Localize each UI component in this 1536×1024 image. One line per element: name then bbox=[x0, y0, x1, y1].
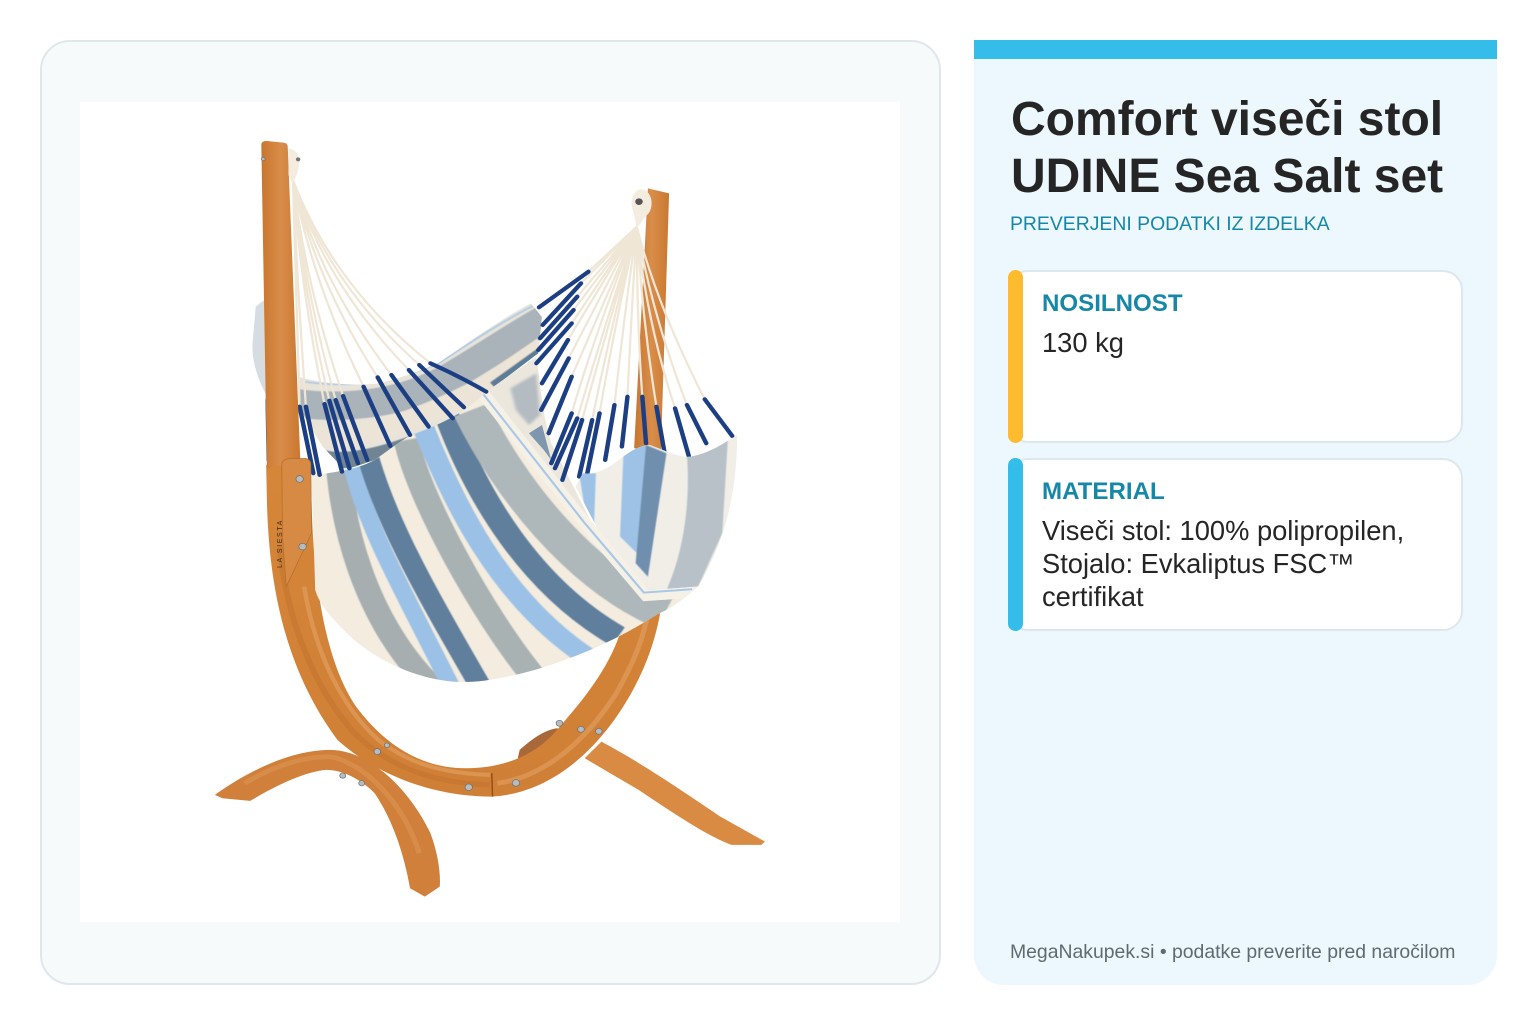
title: UDINE Sea Salt set bbox=[1011, 150, 1443, 203]
right inner fabric bbox=[576, 435, 737, 590]
label: material: MATERIAL bbox=[1042, 478, 1165, 505]
rear fabric: back of seat bbox=[300, 304, 542, 470]
post joint block bbox=[282, 459, 312, 587]
main front seat fabric with stripes bbox=[312, 391, 698, 682]
value: material: Viseči stol: 100% polipropilen, bbox=[1042, 515, 1404, 546]
title: Comfort viseči stol bbox=[1011, 93, 1443, 146]
stand bolts bbox=[261, 157, 602, 791]
subtitle: PREVERJENI PODATKI IZ IZDELKA bbox=[1010, 213, 1330, 235]
label: load capacity: NOSILNOST bbox=[1042, 290, 1183, 317]
left cords bbox=[293, 180, 430, 407]
footer note: MegaNakupek.si • podatke preverite pred naročilom bbox=[1010, 941, 1455, 963]
white photo background bbox=[80, 102, 900, 922]
card accent: amber bbox=[1008, 270, 1023, 443]
cord eyelets bbox=[288, 148, 652, 228]
right cords bbox=[568, 227, 705, 420]
left wooden post bbox=[261, 141, 300, 468]
base foot: left bbox=[215, 750, 440, 897]
inner fold of seat bbox=[486, 357, 590, 520]
brand mark on post: LA SIESTA bbox=[277, 519, 284, 568]
base foot: right bbox=[585, 742, 765, 845]
panel: product info bbox=[974, 40, 1497, 985]
card: material bbox=[1008, 458, 1463, 631]
value: material: Stojalo: Evkaliptus FSC™ bbox=[1042, 548, 1355, 579]
value: material bbox=[1042, 515, 1404, 612]
top accent bar bbox=[974, 40, 1497, 59]
ring: rear shadow bbox=[516, 728, 572, 767]
wooden ring of the stand bbox=[266, 458, 660, 797]
rear fabric flap behind left post bbox=[252, 298, 269, 400]
panel: product image card bbox=[40, 40, 941, 985]
card: load capacity bbox=[1008, 270, 1463, 443]
right wooden post bbox=[634, 188, 669, 450]
title bbox=[1011, 93, 1443, 203]
card accent: blue bbox=[1008, 458, 1023, 631]
product photo: hanging chair on wooden stand bbox=[80, 102, 900, 922]
left blue fringe bbox=[268, 363, 486, 475]
value: material: certifikat bbox=[1042, 581, 1144, 612]
ring highlight and grain bbox=[280, 547, 648, 797]
value: load capacity: 130 kg bbox=[1042, 327, 1124, 358]
right blue fringe bbox=[536, 272, 732, 480]
